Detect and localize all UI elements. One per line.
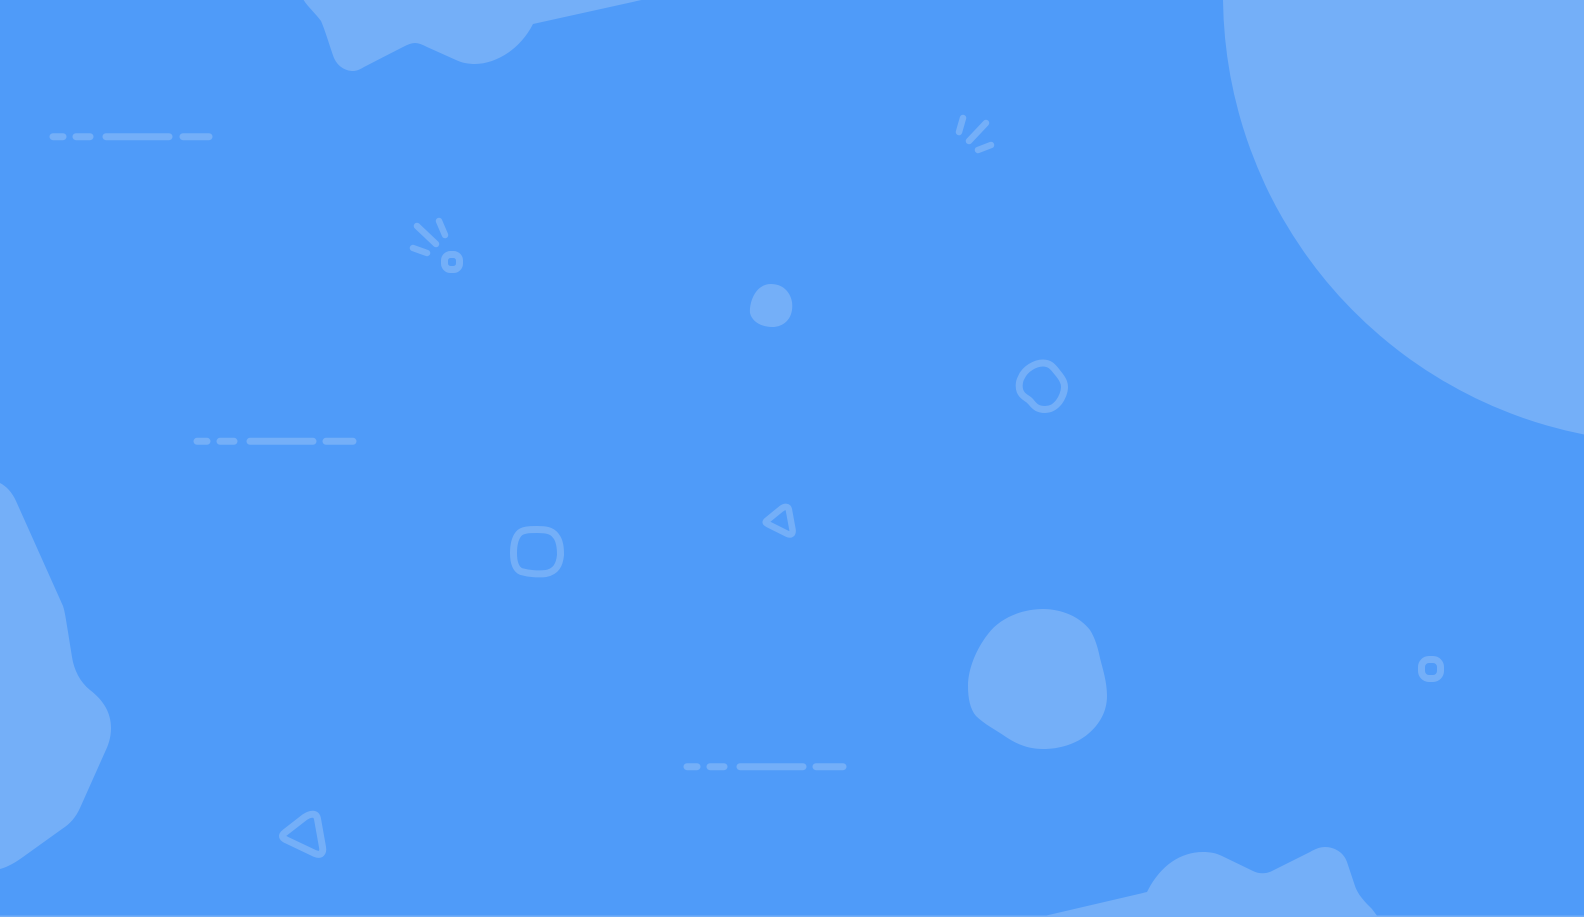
spark: upper right (959, 118, 991, 150)
blob: top (303, 0, 646, 71)
blob: bottom right (1040, 847, 1378, 917)
dashes: middle left (197, 438, 353, 445)
dashes: lower centre (687, 763, 843, 770)
large circle top right (1223, 0, 1584, 434)
bottom edge strip (0, 916, 1584, 917)
spark: upper left with ring (413, 221, 460, 270)
outline: small triangle (766, 507, 793, 534)
outline: blob (1019, 363, 1064, 410)
blob: large lower centre (968, 609, 1107, 749)
blob: small centre (750, 284, 792, 327)
dashes: top left (53, 133, 209, 140)
blob: left edge (0, 483, 111, 869)
outline: rounded square (514, 530, 560, 574)
outline: large triangle (282, 814, 323, 854)
outline: small ring right (1422, 660, 1440, 678)
